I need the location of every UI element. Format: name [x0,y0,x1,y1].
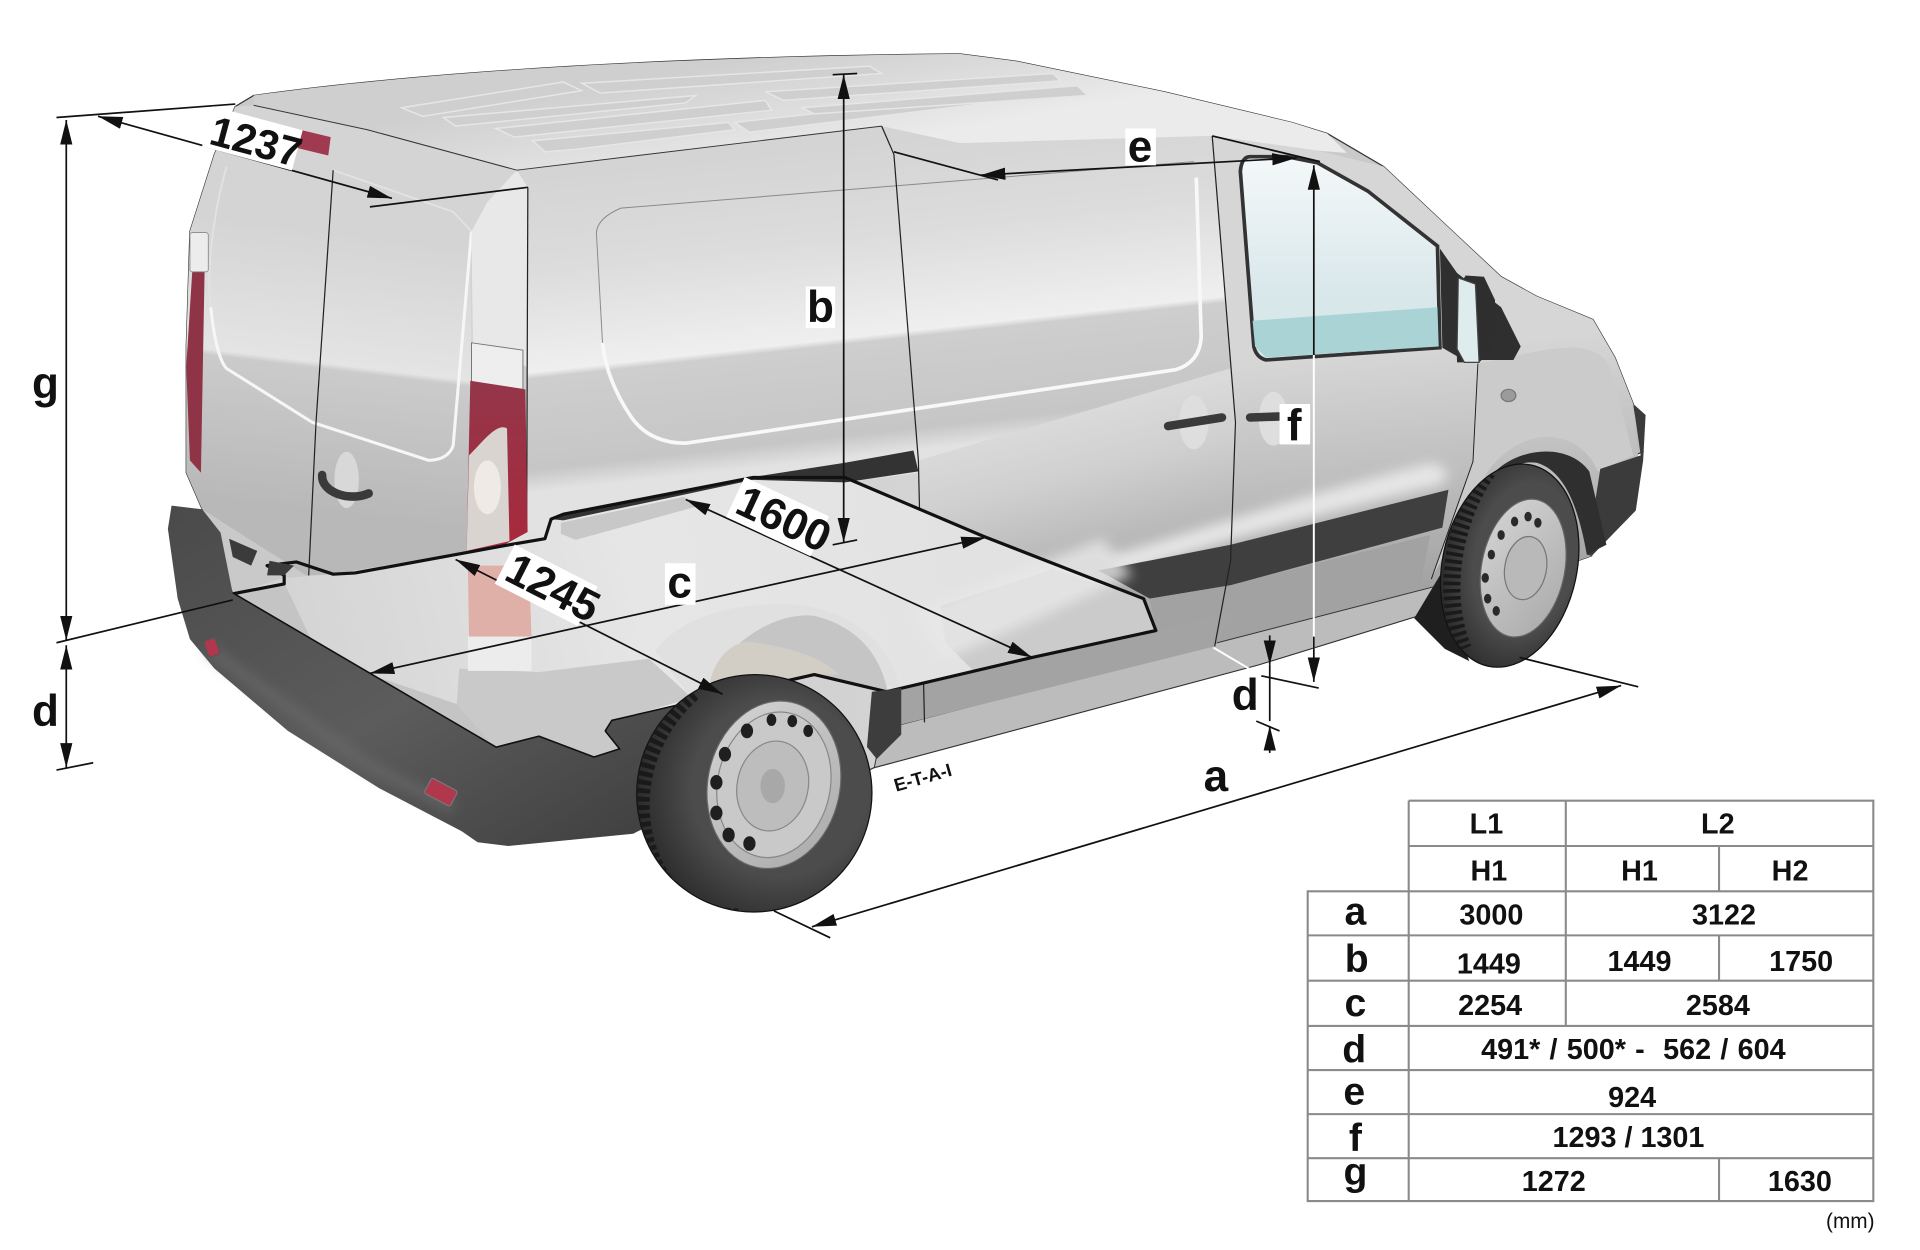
dimension annotations [32,73,1638,938]
table grid [1308,801,1873,1201]
dimension 1245 [456,544,722,694]
front marker lamp [1501,389,1516,402]
rim [1469,492,1577,645]
dimension d rear [32,645,93,770]
van illustration [168,54,1646,938]
wheel holes [710,714,813,851]
wheel arch [655,604,900,698]
wing mirror [1455,275,1495,362]
light reflection on floor [912,539,1133,661]
column headers: L1 [1470,809,1503,841]
fender seam [1431,364,1478,579]
pillar outline [527,187,528,545]
rear reflector right [424,778,458,807]
left tail light [186,269,205,473]
row b: 1449 [1607,946,1671,978]
door seam rear side [882,126,924,722]
row a: a [1345,890,1368,933]
lower side panel highlight [918,367,1234,722]
row g: 1630 [1768,1166,1832,1198]
rear reflector left [203,638,221,658]
row f: 1293 / 1301 [1552,1122,1704,1154]
panel under the cargo floor [887,610,1237,725]
lower door skirt [1041,535,1430,686]
row f [1349,1117,1704,1160]
column headers: H1 [1471,855,1507,887]
left light cap [190,233,208,272]
rear door centre seam [309,170,333,575]
row a: 3000 [1459,899,1523,931]
row b: 1750 [1769,946,1833,978]
row e: e [1343,1070,1365,1113]
rear door emboss line [211,231,472,460]
row d [1342,1029,1786,1072]
hub [1500,533,1552,603]
cab door highlight [1108,463,1448,575]
row a: 3122 [1692,899,1756,931]
row f: f [1349,1117,1363,1160]
dimension 1245: 1245 [498,544,608,632]
door seam front side [1212,136,1235,646]
front handle recess [1259,392,1288,446]
side window-shaped panel emboss [603,178,1201,443]
row c: 2584 [1686,990,1750,1022]
rear light clip [267,561,294,575]
rear handle recess [334,452,359,508]
rear bumper outline lights [229,539,257,566]
column headers: H2 [1772,855,1808,887]
cab door panel [1212,136,1638,665]
mirror glass [1457,278,1479,362]
dimension c: c [667,558,692,607]
row d: 491* / 500* - 562 / 604 [1481,1034,1786,1066]
hub [729,734,817,838]
row g [1343,1151,1832,1198]
rear doors [186,105,527,575]
dimension e: e [1128,123,1152,172]
ghost sliding rail panel [561,497,704,540]
front fender [1431,348,1633,579]
roof ribs [402,66,1087,152]
black pillar behind mirror [1440,249,1521,360]
dimension f: f [1287,402,1302,451]
tail light bulb [474,460,501,514]
dimension d side: d [1232,671,1259,720]
row g: g [1343,1151,1367,1194]
tyre shadow side [1414,575,1469,661]
dimension a [774,657,1638,938]
dimension a: a [1204,752,1229,801]
ghost light base [468,637,531,671]
roof panel [254,54,1347,170]
artist mark: E-T-A-I [891,759,954,796]
column headers: L2 [1701,809,1735,841]
side ghost panel [940,569,1156,671]
side wall panel [517,126,1239,571]
rear bumper [168,506,735,846]
tread [1452,471,1488,649]
right tail light [467,381,528,551]
third brake light [298,130,331,155]
rear lower panel [233,477,1156,758]
rear wheel [636,674,873,913]
bumper highlights [208,649,453,808]
column headers: H1 [1621,855,1658,887]
dark strip along sliding rail [551,451,918,520]
window lower tint [1253,307,1439,357]
row g: 1272 [1522,1166,1586,1198]
tyre [1422,451,1597,680]
rub strip moulding [1098,490,1448,599]
dimensions table [1308,801,1875,1233]
side door handle [1168,417,1222,426]
cargo floor outline [233,477,1156,758]
dimension c [370,537,986,673]
dimension 1237: 1237 [205,107,307,176]
wheel holes [1482,512,1542,616]
side sill [874,585,1442,768]
row b [1345,938,1833,981]
rear door upper emboss line [209,167,472,307]
row b: 1449 [1457,948,1521,980]
front arch [1488,451,1606,555]
row a [1345,890,1756,933]
row e: 924 [1608,1082,1656,1114]
rear corner block [457,659,692,758]
van body shell [186,54,1643,833]
row d: d [1342,1029,1366,1072]
ghost tail light [468,566,531,637]
dimension b [806,73,857,545]
dimension 1237 [98,106,528,207]
rim inner [704,701,844,868]
dimension g [32,104,235,643]
side panel outline [596,162,1194,343]
row c: 2254 [1458,990,1522,1022]
row c [1345,982,1750,1025]
cab window [1240,157,1440,360]
tyre through floor [710,642,839,695]
front door handle [1250,416,1286,417]
front bumper [1587,404,1646,556]
rear corner pillar [472,170,528,367]
row b: b [1345,938,1369,981]
dimension e [894,123,1320,180]
inner arch [722,615,888,695]
row e [1343,1070,1656,1114]
dimension g: g [32,359,59,408]
hub logo [760,769,785,803]
dimension d rear: d [32,687,59,736]
rear door handle [322,475,369,497]
roof edge line [254,105,882,170]
tyre [610,648,899,938]
front wheel [1414,463,1580,668]
dimension 1600 [686,477,1032,657]
rim [692,688,856,881]
dark area behind rear wheel [867,688,901,759]
right tail light cap [472,343,523,389]
tread [640,692,741,918]
column headers [1470,809,1808,887]
tail light clear lens [467,427,509,551]
dimension d side [1232,635,1280,753]
side handle recess [1179,395,1209,449]
dimension b: b [807,283,834,332]
rear face lower strip [233,583,496,748]
row c: c [1345,982,1366,1025]
unit note: (mm) [1826,1210,1875,1233]
dimension 1600: 1600 [729,477,838,562]
dimension f [1213,165,1319,688]
